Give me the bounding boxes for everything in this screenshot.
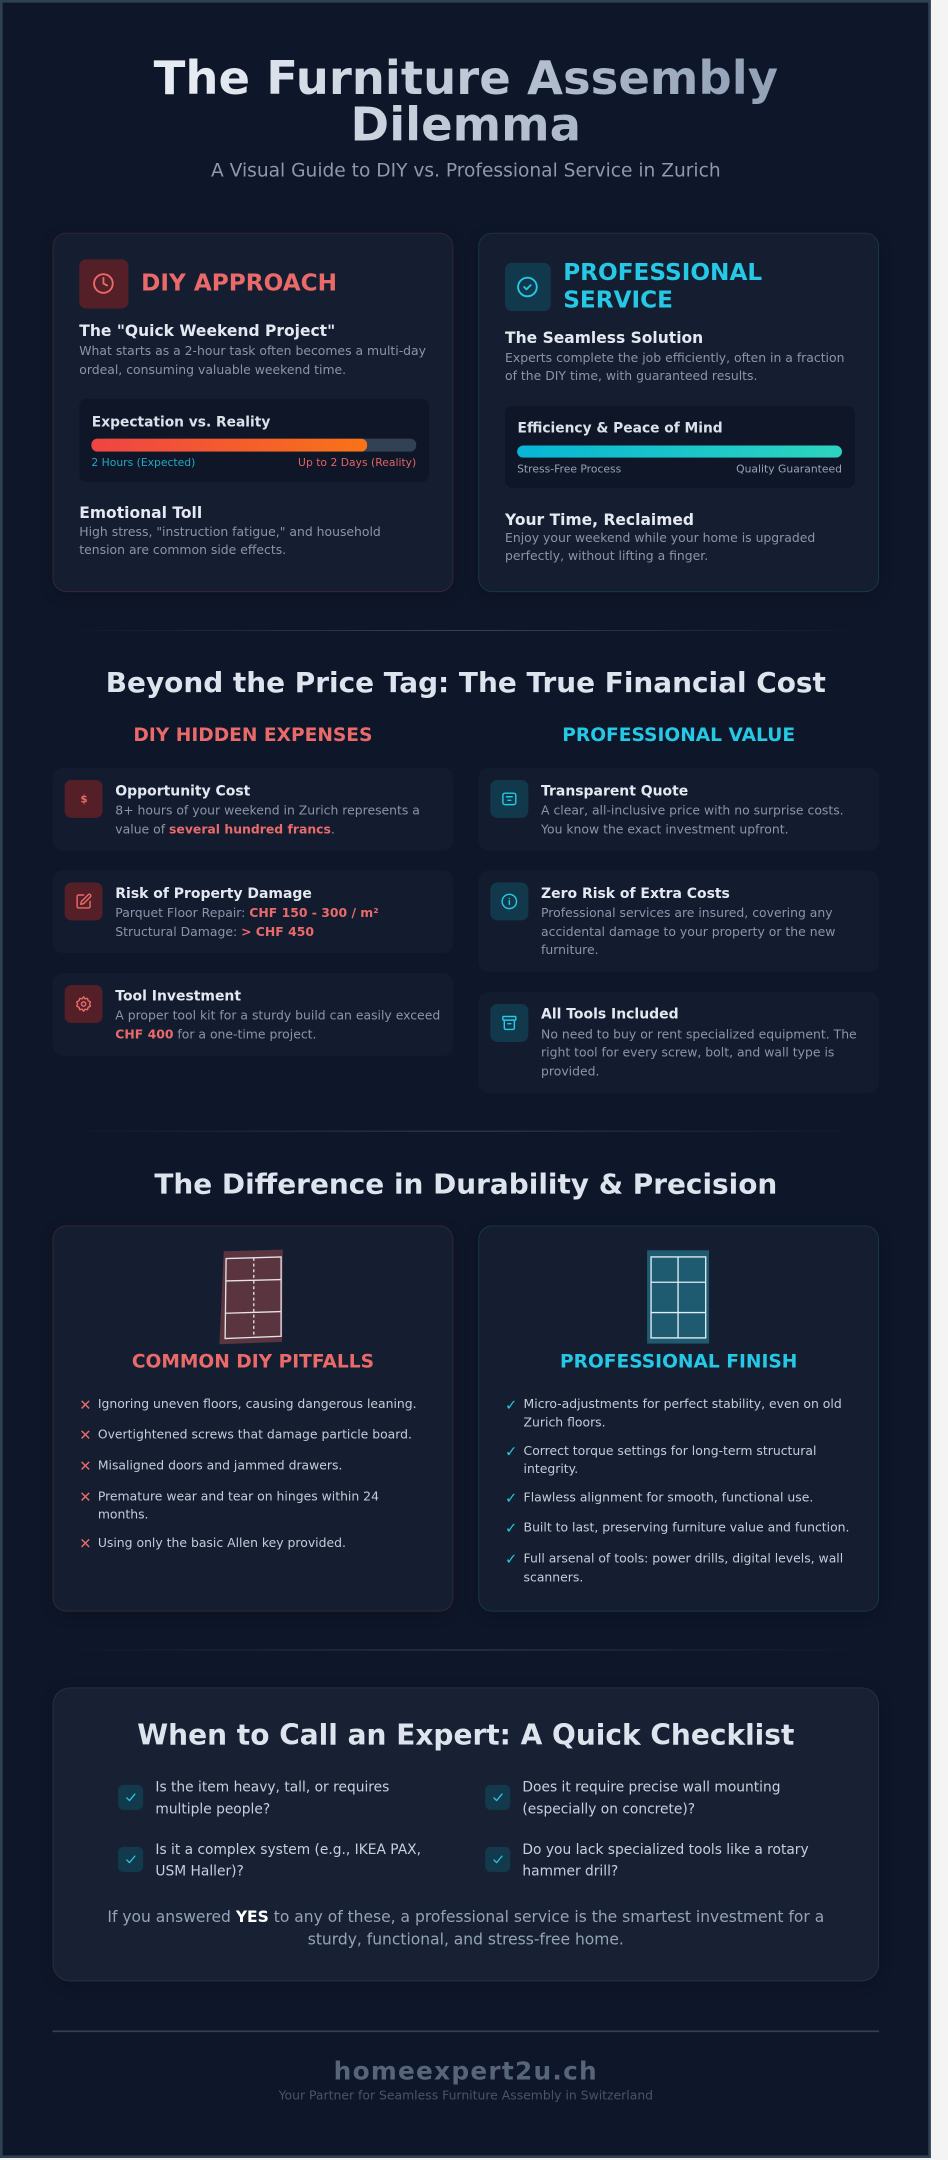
subheading: quick weekend project: The "Quick Weekend Project": [79, 322, 335, 340]
item: opportunity cost: 8+ hours of your weekend in Zurich represents a: [115, 804, 420, 818]
label: expected: 2 Hours (Expected): [91, 456, 195, 469]
icon: quote card: [491, 780, 529, 818]
heading: professional finish: PROFESSIONAL FINISH: [560, 1351, 797, 1373]
chart: expectation vs reality: Expectation vs. Reality: [92, 414, 270, 430]
item: zero risk: Professional services are insured, covering any: [541, 907, 833, 920]
list: professional benefits: Micro-adjustments for perfect stability, even on old: [524, 1397, 842, 1411]
item: property damage: Parquet Floor Repair: CHF 150 - 300 / m²: [115, 907, 379, 920]
list: pitfalls: ✕: [79, 1535, 92, 1553]
list: professional benefits: integrity.: [524, 1463, 578, 1476]
item: opportunity cost: value of several hundred francs.: [115, 823, 335, 836]
icon: check: [118, 1847, 143, 1872]
icon: pen: [65, 883, 103, 920]
item: transparent quote: A clear, all-inclusive price with no surprise costs.: [541, 804, 844, 818]
check item: wall mounting: (especially on concrete)?: [522, 1801, 695, 1817]
item: zero risk: [478, 870, 879, 972]
title: [53, 55, 879, 155]
icon: archive box: [491, 1004, 529, 1042]
heading: professional service: SERVICE: [563, 287, 673, 313]
text: emotional toll: High stress, "instruction fatigue," and household: [79, 525, 381, 539]
list: pitfalls: Premature wear and tear on hinges within 24: [98, 1490, 379, 1503]
check item: heavy item: Is the item heavy, tall, or requires: [155, 1778, 389, 1795]
text: quick weekend project: [79, 345, 426, 377]
list: professional benefits: Full arsenal of tools: power drills, digital levels, wall: [524, 1552, 843, 1566]
label: quality guaranteed: Quality Guaranteed: [736, 462, 842, 475]
check item: wall mounting: [485, 1778, 780, 1817]
list: professional benefits: ✓: [505, 1443, 517, 1460]
list: professional benefits: Built to last, preserving furniture value and function.: [524, 1521, 849, 1535]
checklist conclusion: sturdy, functional, and stress-free home.: [308, 1930, 624, 1948]
subheading: time reclaimed: Your Time, Reclaimed: [505, 511, 694, 529]
check item: specialized tools: hammer drill?: [522, 1863, 618, 1879]
check item: specialized tools: [485, 1841, 809, 1879]
check item: specialized tools: Do you lack specialized tools like a rotary: [522, 1841, 809, 1857]
item: property damage: [53, 870, 453, 953]
item: tool investment: [53, 973, 453, 1056]
icon: dollar: $: [80, 793, 88, 805]
list: professional benefits: ✓: [505, 1397, 517, 1414]
subheading: seamless solution: The Seamless Solution: [505, 329, 703, 347]
icon: check: [485, 1784, 510, 1809]
heading: checklist: When to Call an Expert: A Quick Checklist: [137, 1718, 794, 1751]
list: professional benefits: [505, 1397, 849, 1585]
check item: heavy item: multiple people?: [155, 1801, 270, 1817]
list: professional benefits: Correct torque settings for long-term structural: [524, 1444, 816, 1458]
panel: DIY pitfalls: [53, 1225, 453, 1612]
footer brand: homeexpert2u.ch: [334, 2056, 598, 2085]
title: The Furniture Assembly: [154, 50, 778, 105]
panel: professional finish: [478, 1225, 879, 1612]
check item: complex system: Is it a complex system (e.g., IKEA PAX,: [155, 1841, 421, 1857]
item: transparent quote: Transparent Quote: [541, 782, 688, 799]
illustration: straight cabinet: [647, 1250, 709, 1344]
item: opportunity cost: Opportunity Cost: [115, 782, 250, 799]
item: all tools: No need to buy or rent specialized equipment. The: [541, 1028, 857, 1042]
icon: info: [491, 883, 529, 920]
list: professional benefits: ✓: [505, 1521, 517, 1538]
item: tool investment: CHF 400 for a one-time project.: [115, 1028, 316, 1042]
list: professional benefits: scanners.: [524, 1571, 583, 1585]
item: all tools: All Tools Included: [541, 1006, 679, 1022]
item: all tools: right tool for every screw, bolt, and wall type is: [541, 1046, 834, 1060]
checklist conclusion: [107, 1908, 824, 1948]
item: all tools: [478, 992, 879, 1093]
text: seamless solution: Experts complete the job efficiently, often in a fraction: [505, 351, 844, 365]
item: tool investment: Tool Investment: [115, 987, 241, 1004]
text: time reclaimed: Enjoy your weekend while your home is upgraded: [505, 531, 815, 545]
subheading: DIY hidden expenses: DIY HIDDEN EXPENSES: [133, 725, 372, 746]
title: Dilemma: [351, 97, 581, 152]
text: emotional toll: [79, 525, 381, 558]
item: transparent quote: You know the exact investment upfront.: [541, 823, 789, 836]
heading: financial cost: Beyond the Price Tag: The True Financial Cost: [106, 666, 826, 699]
text: quick weekend project: What starts as a 2-hour task often becomes a multi-day: [79, 345, 426, 359]
heading: professional service: [563, 259, 762, 313]
subheading: emotional toll: Emotional Toll: [79, 504, 202, 522]
chart: expectation vs reality: [79, 399, 429, 482]
icon: clock: [79, 259, 128, 308]
chart: efficiency and peace of mind: Efficiency & Peace of Mind: [518, 420, 723, 436]
label: reality: Up to 2 Days (Reality): [298, 456, 416, 469]
subtitle: A Visual Guide to DIY vs. Professional Service in Zurich: [211, 160, 721, 182]
label: stress free: Stress-Free Process: [517, 462, 621, 475]
chart: efficiency and peace of mind: [505, 406, 854, 488]
heading: professional service: PROFESSIONAL: [563, 259, 762, 286]
footer tagline: Your Partner for Seamless Furniture Assembly in Switzerland: [279, 2089, 653, 2103]
footer rule: [53, 2030, 879, 2032]
panel: professional service: [478, 233, 879, 592]
illustration: crooked cabinet: [220, 1250, 283, 1344]
text: time reclaimed: [505, 531, 815, 564]
icon: check circle: [505, 263, 550, 311]
list: pitfalls: [79, 1397, 417, 1553]
text: emotional toll: tension are common side effects.: [79, 544, 286, 558]
subheading: professional value: PROFESSIONAL VALUE: [562, 725, 795, 746]
list: pitfalls: ✕: [79, 1427, 92, 1445]
check item: complex system: [118, 1841, 421, 1879]
icon: gear: [65, 985, 103, 1023]
list: professional benefits: Flawless alignment for smooth, functional use.: [524, 1491, 813, 1504]
checklist conclusion: If you answered YES to any of these, a professional service is the smartest investment for a: [107, 1908, 824, 1926]
progress bar: full: [517, 445, 842, 458]
list: pitfalls: Ignoring uneven floors, causing dangerous leaning.: [98, 1397, 417, 1411]
check item: complex system: USM Haller)?: [155, 1863, 244, 1879]
list: pitfalls: ✕: [79, 1489, 92, 1506]
progress bar: 85 percent: [91, 439, 416, 451]
list: pitfalls: Using only the basic Allen key provided.: [98, 1536, 346, 1550]
icon: check: [118, 1784, 143, 1809]
item: opportunity cost: [53, 768, 453, 851]
item: zero risk: Zero Risk of Extra Costs: [541, 885, 730, 901]
list: pitfalls: Misaligned doors and jammed drawers.: [98, 1459, 342, 1473]
item: tool investment: A proper tool kit for a sturdy build can easily exceed: [115, 1009, 440, 1023]
item: all tools: provided.: [541, 1065, 599, 1079]
text: seamless solution: of the DIY time, with guaranteed results.: [505, 370, 757, 384]
item: property damage: Structural Damage: > CHF 450: [115, 925, 314, 939]
text: seamless solution: [505, 351, 844, 384]
list: professional benefits: ✓: [505, 1551, 517, 1569]
item: zero risk: accidental damage to your property or the new: [541, 925, 835, 939]
list: professional benefits: Zurich floors.: [524, 1416, 606, 1430]
item: transparent quote: [478, 768, 879, 851]
text: quick weekend project: ordeal, consuming valuable weekend time.: [79, 363, 346, 377]
icon: dollar: [65, 780, 103, 818]
heading: durability and precision: The Difference in Durability & Precision: [154, 1168, 777, 1201]
check item: wall mounting: Does it require precise wall mounting: [522, 1778, 780, 1795]
text: time reclaimed: perfectly, without lifting a finger.: [505, 550, 708, 564]
check item: heavy item: [118, 1778, 389, 1817]
list: pitfalls: ✕: [79, 1397, 92, 1414]
item: zero risk: furniture.: [541, 944, 599, 958]
heading: DIY approach: DIY APPROACH: [141, 269, 337, 296]
panel: DIY approach: [53, 233, 453, 592]
icon: check: [485, 1847, 510, 1872]
list: pitfalls: months.: [98, 1508, 148, 1522]
panel: quick checklist: [53, 1687, 879, 1981]
list: pitfalls: ✕: [79, 1458, 92, 1475]
list: pitfalls: Overtightened screws that damage particle board.: [98, 1428, 412, 1442]
item: property damage: Risk of Property Damage: [115, 885, 312, 901]
list: professional benefits: ✓: [505, 1490, 517, 1507]
heading: common DIY pitfalls: COMMON DIY PITFALLS: [132, 1351, 374, 1373]
